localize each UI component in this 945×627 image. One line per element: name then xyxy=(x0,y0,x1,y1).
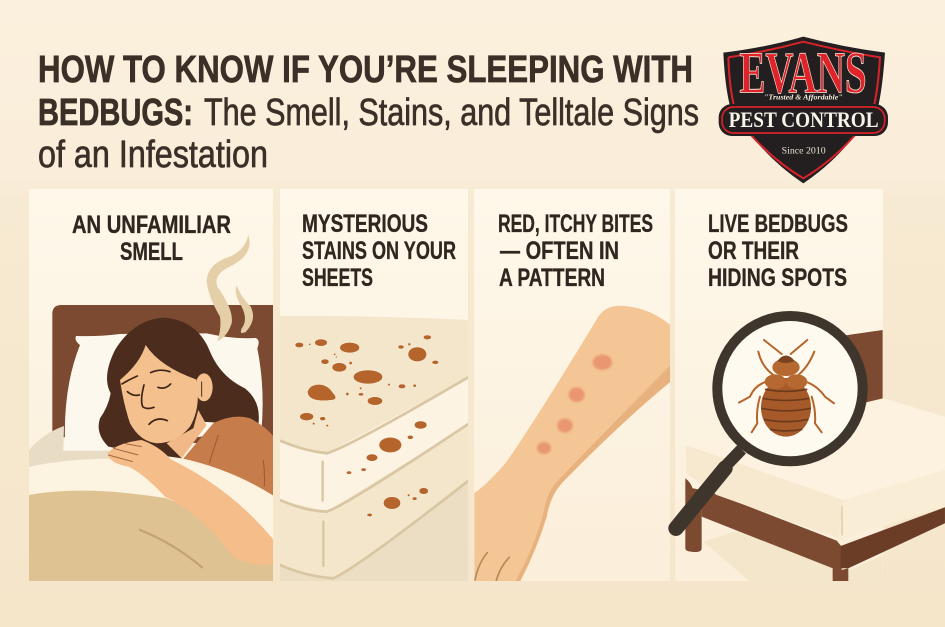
title: HOW TO KNOW IF YOU’RE SLEEPING WITH xyxy=(38,49,693,91)
blanket xyxy=(32,458,110,466)
illustration: bed frame xyxy=(685,330,945,582)
heading: live bedbugs: OR THEIR xyxy=(708,237,799,265)
steam xyxy=(207,235,253,341)
icon: magnifying glass with bedbug xyxy=(676,316,863,528)
panel: mysterious stains xyxy=(280,189,470,582)
heading: mysterious stains xyxy=(302,210,456,292)
bedbug xyxy=(739,340,834,437)
illustration: arm with bites xyxy=(474,306,671,582)
logo banner xyxy=(719,104,888,136)
panel: live bedbugs xyxy=(675,189,945,582)
heading: live bedbugs: LIVE BEDBUGS xyxy=(708,210,848,238)
heading: red itchy bites: — OFTEN IN xyxy=(500,237,619,265)
panel: red itchy bites xyxy=(474,189,671,582)
arm xyxy=(107,440,275,565)
panel: an unfamiliar smell xyxy=(29,189,275,582)
hair xyxy=(99,318,259,458)
logo wordmark: Evans: EVANS xyxy=(739,40,867,106)
bite marks xyxy=(537,355,612,454)
shirt xyxy=(183,417,275,497)
illustration: woman sleeping in bed xyxy=(29,235,275,582)
heading: an unfamiliar smell: AN UNFAMILIAR xyxy=(72,211,231,239)
title: of an Infestation xyxy=(38,134,268,176)
logo tagline: "Trusted & Affordable" xyxy=(764,94,843,102)
heading: mysterious stains: SHEETS xyxy=(302,264,373,292)
heading: mysterious stains: STAINS ON YOUR xyxy=(302,237,456,265)
title: The Smell, Stains, and Telltale Signs xyxy=(204,92,699,134)
facial features xyxy=(122,370,171,424)
neck xyxy=(167,410,207,458)
heading: live bedbugs: HIDING SPOTS xyxy=(708,264,847,292)
title xyxy=(38,49,699,176)
logo since date: Since 2010 xyxy=(782,145,826,156)
heading: red itchy bites xyxy=(498,210,653,292)
face xyxy=(120,345,198,443)
logo: Evans Pest Control shield xyxy=(719,37,888,183)
heading: an unfamiliar smell xyxy=(72,211,231,266)
heading: red itchy bites: A PATTERN xyxy=(499,264,605,292)
title: BEDBUGS: xyxy=(38,92,193,134)
stains xyxy=(295,335,439,517)
heading: mysterious stains: MYSTERIOUS xyxy=(302,210,428,238)
heading: an unfamiliar smell: SMELL xyxy=(120,238,183,266)
heading: live bedbugs xyxy=(708,210,848,292)
illustration: stained mattress xyxy=(280,316,470,582)
heading: red itchy bites: RED, ITCHY BITES xyxy=(498,210,653,238)
logo banner: PEST CONTROL xyxy=(729,107,879,132)
